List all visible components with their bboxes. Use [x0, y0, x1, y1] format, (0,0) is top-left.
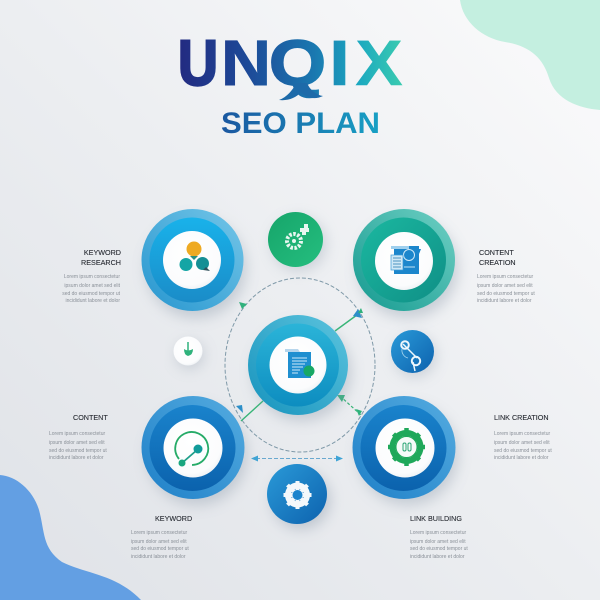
- shadow: [358, 218, 458, 318]
- text block: keyword research: KEYWORD: [84, 248, 121, 257]
- shadow: [147, 405, 247, 505]
- icon: green gauge: [175, 432, 208, 466]
- outer ring: [142, 396, 244, 499]
- logo wordmark: N: [221, 27, 271, 99]
- text block: link creation: ipsum dolor amet sed elit: [494, 440, 550, 446]
- text block: link building: [410, 514, 468, 560]
- outer ring: [352, 396, 456, 499]
- text block: link creation: [494, 413, 552, 461]
- text block: keyword: [131, 514, 192, 560]
- text block: link creation: Lorem ipsum consectetur: [494, 431, 550, 437]
- shadow: [146, 218, 246, 318]
- text block: keyword: Lorem ipsum consectetur: [131, 530, 187, 536]
- panel: content node: [142, 396, 247, 505]
- title: [178, 27, 403, 140]
- icon: green gear badge: [268, 212, 326, 271]
- text block: link creation: sed do eiusmod tempor ut: [494, 448, 552, 454]
- white disc: [163, 231, 221, 289]
- shadow: [358, 405, 458, 505]
- text block: content creation: CONTENT: [479, 248, 514, 257]
- text block: keyword research: RESEARCH: [81, 258, 121, 267]
- text block: keyword: KEYWORD: [155, 514, 192, 523]
- text block: content creation: sed do eiusmod tempor ut: [477, 291, 535, 297]
- outer ring: [353, 209, 455, 311]
- middle ring: [150, 405, 236, 491]
- icon: documents: [391, 246, 421, 274]
- middle ring: [361, 218, 446, 302]
- text block: content creation: incididunt labore et dolor: [477, 298, 532, 304]
- text block: keyword: sed do eiusmod tempor ut: [131, 546, 189, 552]
- text block: link creation: LINK CREATION: [494, 413, 549, 422]
- text block: keyword: ipsum dolor amet sed elit: [131, 539, 187, 545]
- text block: link creation: incididunt labore et dolor: [494, 455, 549, 461]
- logo wordmark: [178, 27, 403, 99]
- outer ring: [142, 209, 244, 311]
- logo wordmark: I: [329, 27, 350, 99]
- text block: link building: incididunt labore et dolor: [410, 554, 465, 560]
- blob: top right mint: [460, 0, 600, 110]
- icon: people group: [180, 242, 210, 271]
- text block: content: [49, 413, 108, 461]
- arrow: horizontal double-headed: [251, 456, 343, 462]
- text block: content: ipsum dolor amet sed elit: [49, 440, 105, 446]
- text block: keyword research: Lorem ipsum consectetur: [64, 274, 120, 280]
- icon: green gear: [388, 428, 425, 466]
- logo wordmark: X: [356, 27, 403, 99]
- white disc: [270, 336, 326, 394]
- white disc: [376, 418, 434, 478]
- white disc: [375, 232, 433, 290]
- text block: content: sed do eiusmod tempor ut: [49, 448, 107, 454]
- icon: document with badge: [285, 349, 314, 378]
- connector: centre to top right: [335, 308, 363, 331]
- panel: central document node: [248, 315, 351, 421]
- text block: content creation: CREATION: [479, 258, 516, 267]
- text block: keyword research: ipsum dolor amet sed elit: [64, 283, 121, 289]
- text block: keyword research: sed do eiusmod tempor ut: [62, 291, 121, 297]
- text block: link building: sed do eiusmod tempor ut: [410, 546, 468, 552]
- arrow: orbit top left: [239, 302, 247, 309]
- shadow: [253, 323, 351, 421]
- text block: keyword: incididunt labore et dolor: [131, 554, 186, 560]
- text block: content creation: ipsum dolor amet sed elit: [477, 283, 533, 289]
- arrow: orbit bottom left: [236, 405, 243, 413]
- icon: white leaf badge: [174, 336, 204, 369]
- text block: keyword research: [62, 248, 121, 304]
- text block: keyword research: incididunt labore et dolor: [66, 298, 120, 304]
- panel: content creation node: [353, 209, 458, 318]
- white disc: [164, 418, 222, 478]
- subtitle: SEO PLAN: [221, 107, 380, 140]
- outer ring: [248, 315, 348, 415]
- panel: link creation node: [352, 396, 458, 505]
- text block: content creation: Lorem ipsum consectetur: [477, 274, 533, 280]
- text block: link building: ipsum dolor amet sed elit: [410, 539, 466, 545]
- text block: content creation: [477, 248, 535, 304]
- logo wordmark: U: [178, 27, 218, 99]
- connector: centre to bottom right: [337, 395, 362, 416]
- text block: link building: LINK BUILDING: [410, 514, 462, 523]
- connector: centre to bottom left: [241, 401, 263, 421]
- logo Q tail: [279, 83, 323, 100]
- dashed orbit: [225, 278, 375, 452]
- panel: keyword research node: [142, 209, 246, 318]
- text block: content: incididunt labore et dolor: [49, 455, 104, 461]
- icon: blue link badge: [391, 330, 436, 377]
- middle ring: [360, 405, 446, 491]
- icon: blue gear badge: [267, 464, 330, 529]
- text block: link building: Lorem ipsum consectetur: [410, 530, 466, 536]
- middle ring: [256, 324, 339, 406]
- text block: content: CONTENT: [73, 413, 108, 422]
- logo wordmark: Q: [269, 27, 326, 99]
- middle ring: [150, 218, 234, 302]
- blob: bottom left blue: [0, 475, 141, 600]
- text block: content: Lorem ipsum consectetur: [49, 431, 105, 437]
